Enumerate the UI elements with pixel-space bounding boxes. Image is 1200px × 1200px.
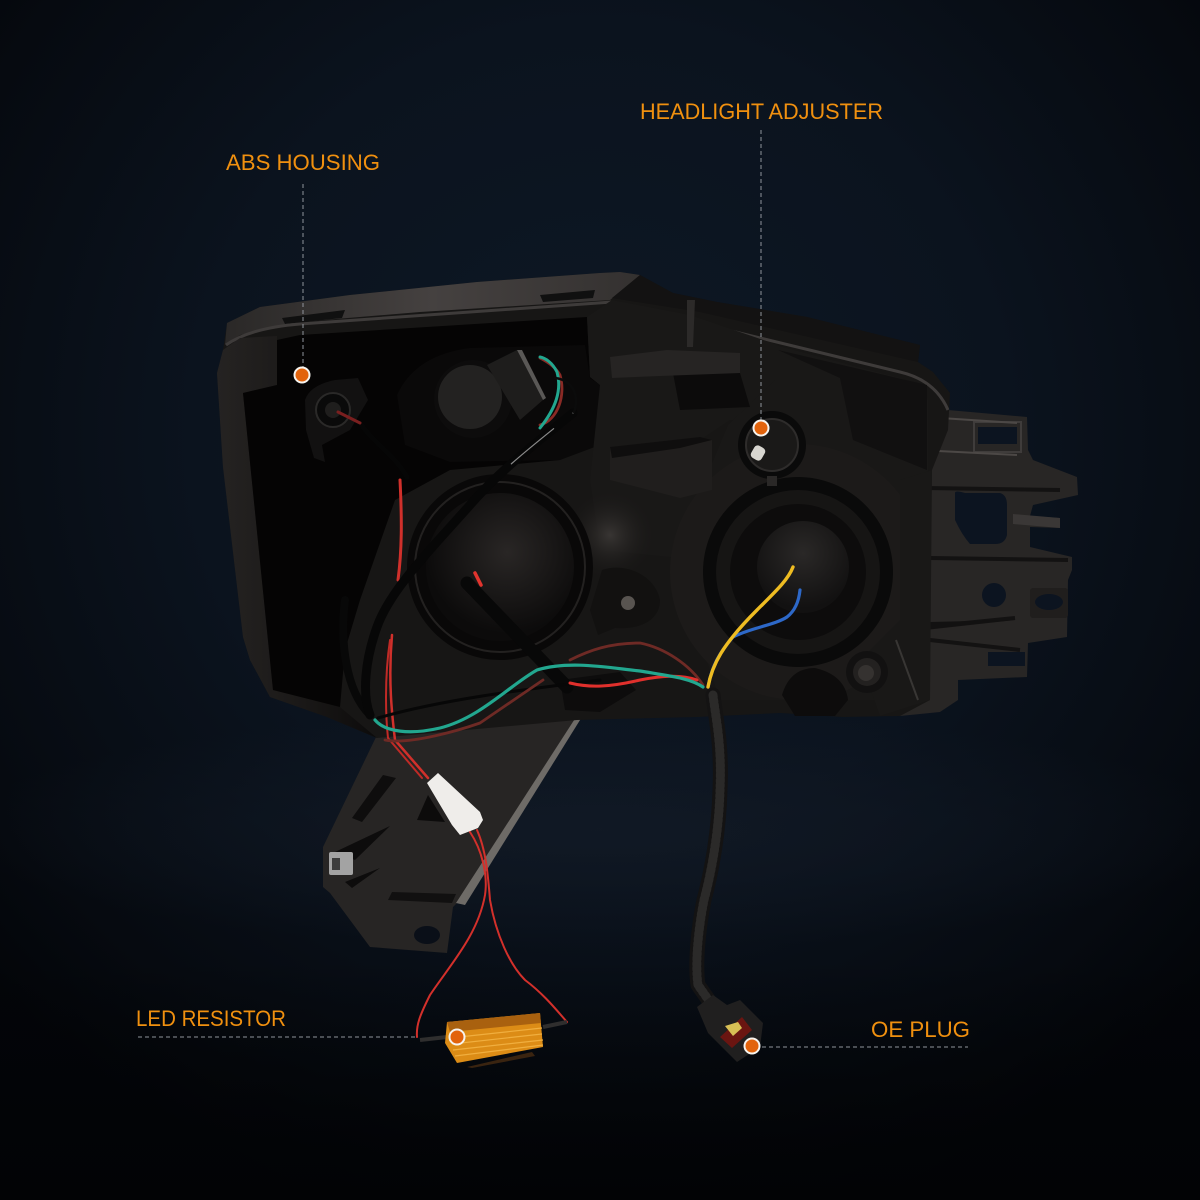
connector	[487, 350, 543, 420]
callout: headlight adjuster	[640, 99, 883, 436]
right panel	[700, 345, 928, 700]
centre shelf	[587, 300, 778, 560]
bolt	[846, 651, 888, 693]
lower mounting bracket	[323, 712, 585, 953]
top clips	[282, 290, 595, 324]
rectangular block	[610, 437, 712, 498]
callout: headlight adjuster: HEADLIGHT ADJUSTER	[640, 99, 883, 124]
callout: led resistor: LED RESISTOR	[136, 1006, 286, 1031]
wires	[338, 357, 800, 1037]
capped bulb	[397, 345, 600, 462]
left wall	[217, 336, 377, 738]
main housing	[217, 272, 950, 738]
callout: oe plug: OE PLUG	[871, 1017, 970, 1042]
callout: oe plug	[744, 1017, 970, 1054]
callout: led resistor	[136, 1006, 464, 1044]
led resistor	[420, 1013, 567, 1068]
low beam projector left	[407, 474, 593, 660]
oe plug	[697, 995, 763, 1062]
ear shape between projectors	[590, 568, 660, 635]
adjuster knob block	[610, 300, 750, 410]
bottom clips	[782, 668, 848, 716]
top rim	[225, 272, 640, 345]
abs housing socket	[305, 378, 368, 462]
callout: abs housing	[226, 150, 380, 382]
headlight adjuster socket	[738, 411, 806, 486]
headlight assembly	[217, 272, 1078, 1037]
right side mounting tabs	[878, 410, 1078, 716]
high beam projector right	[703, 477, 893, 667]
white connector	[427, 773, 483, 835]
callout: abs housing: ABS HOUSING	[226, 150, 380, 175]
frame edge	[226, 302, 948, 410]
